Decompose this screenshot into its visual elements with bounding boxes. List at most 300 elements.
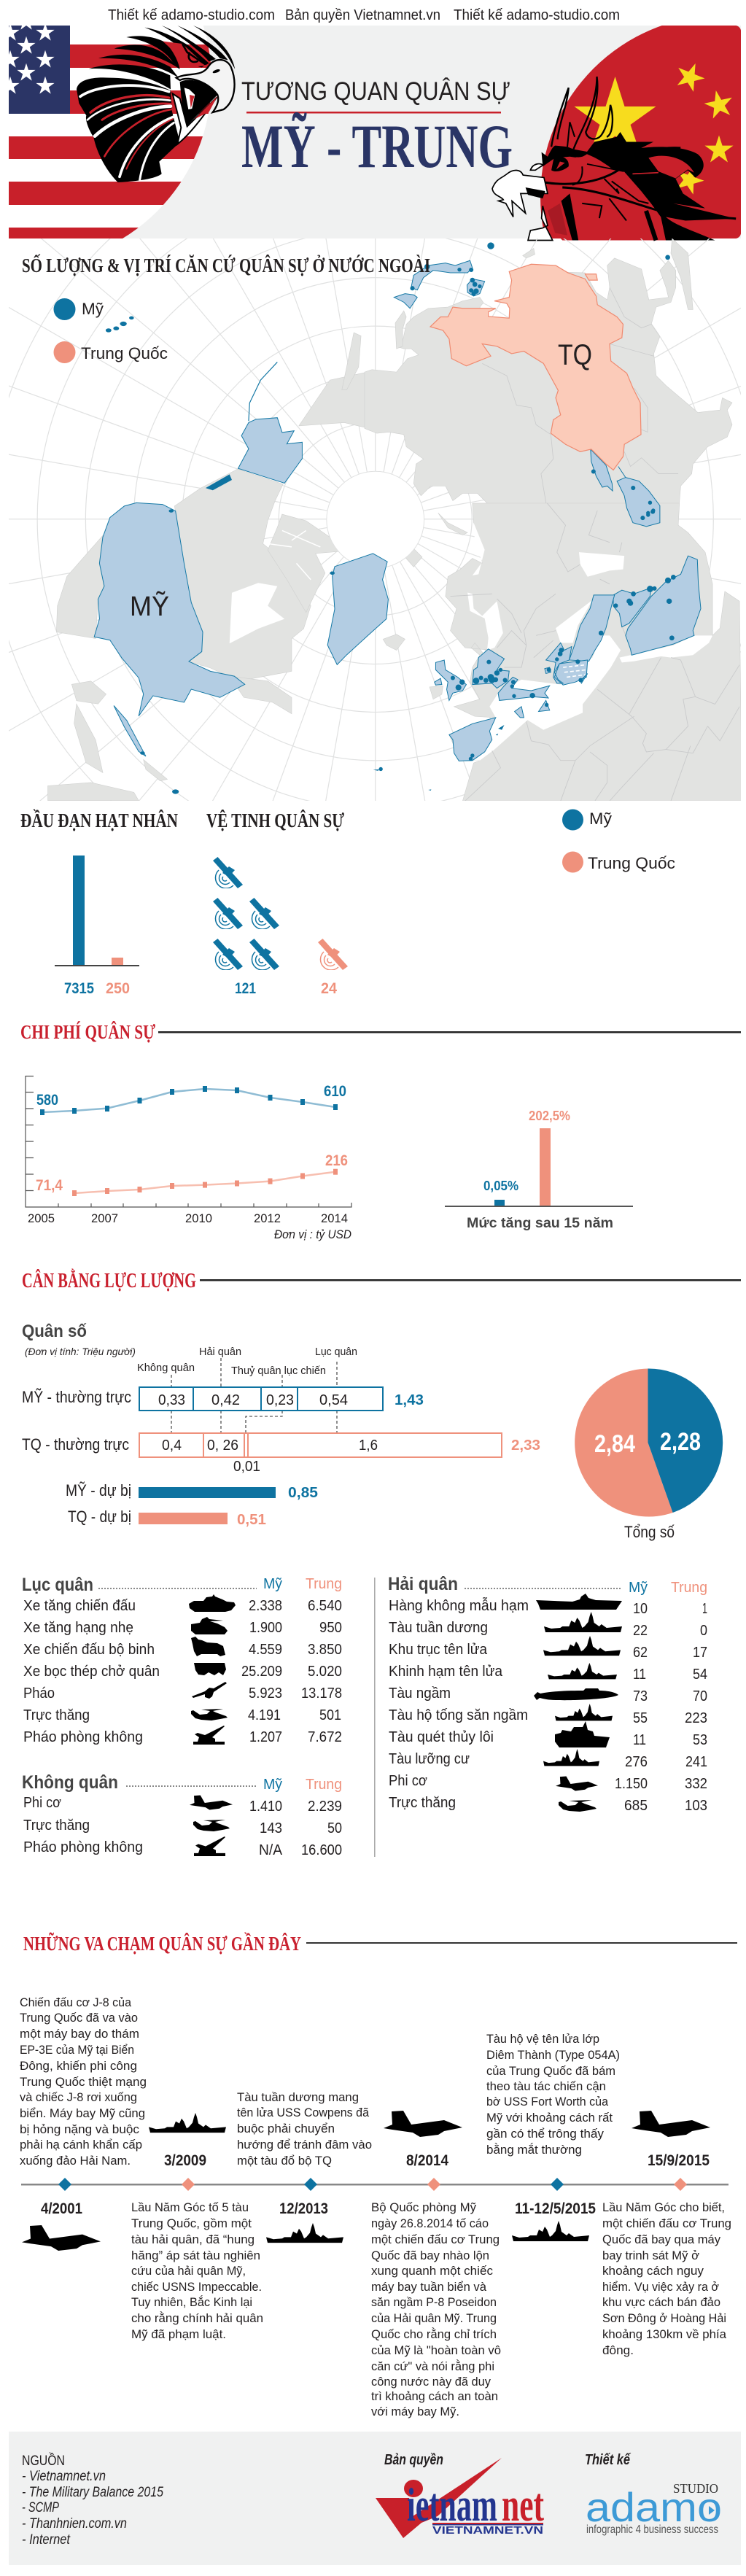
- line chart: spending 2005-2014: 2005: [28, 1211, 55, 1225]
- row: cruisers: [389, 1612, 707, 1639]
- event: 8/2014 text: xung quanh một chiếc: [371, 2264, 493, 2278]
- stacked bar: China active: 0,4: [162, 1438, 182, 1454]
- event: 11-12/5/2015 text: bằng mắt thường: [486, 2143, 582, 2157]
- row: infantry fighting vehicles: [23, 1637, 342, 1658]
- land: Arctic islands: [268, 513, 338, 613]
- event: 11-12/5/2015 text: theo tàu tác chiến cận: [486, 2079, 606, 2093]
- legend: map: Trung Quốc: [81, 344, 168, 362]
- bar: US reserve: 0,85: [288, 1485, 318, 1501]
- stacked bar: China active: 0,01: [233, 1459, 260, 1475]
- text: sources: - Vietnamnet.vn: [22, 2469, 106, 2484]
- event: 4/2001 text: Trung Quốc đã va vào: [20, 2011, 138, 2025]
- row: minesweepers: 53: [693, 1732, 707, 1748]
- row: main battle tanks: [23, 1594, 342, 1614]
- event: 4/2001 text: Trung Quốc thiệt mạng: [20, 2075, 147, 2089]
- event: 15/9/2015 text: Sơn Đông ở Hoàng Hải: [602, 2311, 726, 2325]
- stacked bar: US active: 0,42: [211, 1392, 240, 1408]
- icon: US flag: [9, 26, 211, 238]
- heading: army: Mỹ: [263, 1576, 282, 1592]
- stacked bar: China active: 1,6: [359, 1438, 378, 1454]
- row: naval aircraft: [389, 1773, 707, 1792]
- legend: right side: [562, 810, 675, 872]
- event: 15/9/2015 text: Quốc đã bay qua máy: [602, 2232, 720, 2246]
- event: 3/2009 text: Lầu Năm Góc tố 5 tàu: [131, 2200, 249, 2214]
- row: frigates: 11: [633, 1667, 646, 1683]
- event: 3/2009 text: hăng” áp sát tàu nghiên: [131, 2249, 260, 2262]
- row: corvettes: Tàu hộ tống săn ngầm: [389, 1707, 528, 1723]
- line chart: spending 2005-2014: 71,4: [36, 1177, 63, 1194]
- event: 4/2001 text: Đông, khiến phi công: [20, 2059, 137, 2073]
- event: 11-12/5/2015 text: [486, 2032, 620, 2157]
- icon: ship 11-12/5/2015: [512, 2221, 589, 2241]
- row: air force anti-aircraft: 16.600: [301, 1842, 342, 1858]
- event: 3/2009 text: tàu hải quân, đã “hung: [131, 2232, 255, 2246]
- stacked bar: US active: 0,23: [266, 1392, 294, 1408]
- region: Germany: [473, 649, 509, 688]
- heading: army: Trung: [306, 1576, 342, 1592]
- event: 3/2009 text: chiếc USNS Impeccable.: [131, 2280, 262, 2294]
- label: China on map: TQ: [558, 339, 592, 371]
- row: infantry fighting vehicles: 3.850: [308, 1642, 342, 1658]
- region: China: [430, 264, 641, 470]
- row: aircraft: 2.239: [308, 1799, 342, 1815]
- heading: navy: [388, 1574, 707, 1596]
- row: air force anti-aircraft: N/A: [259, 1842, 283, 1858]
- heading: overseas bases: SỐ LƯỢNG & VỊ TRÍ CĂN CỨ QUÂN SỰ Ở NƯỚC NGOÀI: [22, 254, 430, 276]
- row: amphibious ships: Tàu lưỡng cư: [389, 1751, 470, 1767]
- stacked bar: US active: 1,43: [395, 1392, 424, 1408]
- panel: footer: [9, 2432, 741, 2565]
- date: 11-12/5/2015: 11-12/5/2015: [515, 2200, 596, 2217]
- panel: navy table: [388, 1574, 707, 1814]
- stacked bar: US active: 0,54: [319, 1392, 348, 1408]
- row: amphibious ships: [389, 1749, 707, 1770]
- sea cut-outs: [467, 593, 503, 651]
- event: 8/2014 text: công nước này đã duy: [371, 2375, 491, 2389]
- event: 8/2014 text: [371, 2200, 501, 2418]
- label: copyright: Bản quyền: [384, 2452, 443, 2468]
- event: 15/9/2015 text: đông.: [602, 2343, 634, 2357]
- land: Chukotka: [299, 372, 368, 428]
- region: Balkans and Greece: [545, 643, 588, 685]
- row: naval helicopters: 685: [624, 1798, 648, 1814]
- row: aircraft: Phi cơ: [23, 1795, 61, 1811]
- icon: jet 15/9/2015: [632, 2111, 710, 2137]
- row: light tanks: Xe tăng hạng nhẹ: [23, 1620, 133, 1636]
- row: anti-aircraft: 7.672: [308, 1729, 342, 1745]
- row: frigates: [389, 1663, 707, 1683]
- stacked bar: US active: 0,33: [158, 1392, 185, 1408]
- row: armoured personnel carriers: 25.209: [241, 1664, 282, 1680]
- row: amphibious ships: 276: [625, 1754, 648, 1770]
- event: 3/2009 text: Trung Quốc, gồm một: [131, 2216, 252, 2230]
- logo: adamo studio: infographic 4 business success: [586, 2523, 718, 2536]
- event: 8/2014 text: ngày 26.8.2014 tố cáo: [371, 2216, 489, 2230]
- row: helicopters: 501: [319, 1707, 341, 1723]
- bar: China reserve: [68, 1508, 266, 1528]
- icon: jet 4/2001: [22, 2225, 101, 2251]
- region: Japan: [394, 260, 485, 309]
- icons: US satellites: [213, 857, 279, 970]
- text: sources: - The Military Balance 2015: [22, 2485, 163, 2500]
- event: 3/2009 text: Mỹ đã phạm luật.: [131, 2327, 226, 2341]
- icon: ship 12/2013: [266, 2223, 343, 2243]
- event: 8/2014 text: Quốc cho rằng chỉ trích: [371, 2327, 497, 2341]
- line chart: spending 2005-2014: 2010: [185, 1211, 212, 1225]
- value: China satellites: 24: [321, 980, 337, 997]
- bar: China reserve: 0,51: [237, 1512, 266, 1528]
- row: amphibious ships: 241: [685, 1754, 707, 1770]
- row: air force helicopters: 143: [260, 1820, 282, 1836]
- legend: map: Mỹ: [82, 300, 104, 318]
- text: sources: [22, 2453, 163, 2548]
- region: Italy: [498, 677, 550, 718]
- pie chart: total: [575, 1368, 723, 1541]
- row: armoured personnel carriers: [23, 1663, 342, 1680]
- row: aircraft: [23, 1795, 342, 1815]
- stacked bar: US active: [22, 1387, 424, 1411]
- event: 12/2013 text: Tàu tuần dương mang: [237, 2090, 359, 2104]
- heading: army: [22, 1575, 342, 1595]
- icon: ship 3/2009: [149, 2113, 226, 2133]
- bases: Europe and Middle East dots: [378, 508, 676, 771]
- row: aircraft carriers: 1: [702, 1601, 707, 1617]
- row: frigates: Khinh hạm tên lửa: [389, 1664, 503, 1680]
- event: 8/2014 text: của Mỹ là "hoàn toàn vô: [371, 2343, 501, 2357]
- bar: US reserve: [66, 1481, 318, 1501]
- event: 15/9/2015 text: một chiến đấu cơ Trung: [602, 2216, 731, 2230]
- row: naval aircraft: Phi cơ: [389, 1773, 427, 1789]
- row: helicopters: 4.191: [248, 1707, 281, 1723]
- bar chart: warheads: 7315: [64, 980, 94, 997]
- labels: service branches: Thuỷ quân lục chiến: [231, 1365, 326, 1377]
- event: 4/2001 text: Chiến đấu cơ J-8 của: [20, 1995, 132, 2009]
- regions: Europe and Middle East: [373, 508, 701, 791]
- legend: map: [54, 298, 168, 363]
- dashed connectors: [171, 1358, 337, 1433]
- event: 11-12/5/2015 text: Diêm Thành (Type 054A): [486, 2048, 620, 2062]
- panel: air force table: [22, 1772, 342, 1858]
- line chart: spending 2005-2014: 580: [36, 1092, 58, 1109]
- event: 8/2014 text: một chiến đấu cơ Trung: [371, 2232, 500, 2246]
- row: air force anti-aircraft: [23, 1836, 342, 1858]
- line chart: spending 2005-2014: [26, 1076, 351, 1241]
- regions: Asia: [394, 242, 670, 527]
- stacked bar: US active: MỸ - thường trực: [22, 1388, 131, 1406]
- date: 12/2013: 12/2013: [279, 2200, 328, 2217]
- bar chart: warheads: [55, 856, 139, 997]
- pie chart: total: 2,28: [660, 1428, 701, 1456]
- row: aircraft: 1.410: [249, 1799, 282, 1815]
- row: air force helicopters: 50: [327, 1820, 342, 1836]
- labels: service branches: Không quân: [137, 1362, 195, 1374]
- land: eastern Canada: [230, 676, 292, 714]
- bar chart: increase after 15 years: 0,05%: [483, 1179, 518, 1193]
- region: Aleutian arc: [249, 362, 277, 421]
- row: armoured personnel carriers: Xe bọc thép chở quân: [23, 1664, 160, 1680]
- row: naval helicopters: 103: [685, 1798, 707, 1814]
- event: 8/2014 text: của Hải quân Mỹ. Trung: [371, 2311, 497, 2325]
- event: 4/2001 text: bị hỏng nặng và buộc: [20, 2122, 139, 2136]
- bar chart: increase after 15 years: [445, 1109, 633, 1231]
- bar chart: warheads: 250: [106, 980, 130, 997]
- heading: army: Lục quân: [22, 1575, 93, 1595]
- event: 4/2001 text: xuống đảo Hải Nam.: [20, 2154, 131, 2168]
- text: sources: NGUỒN: [22, 2453, 65, 2469]
- heading: navy: Mỹ: [629, 1580, 648, 1596]
- heading: balance of forces: CÂN BẰNG LỰC LƯỢNG: [22, 1268, 196, 1292]
- row: corvettes: [389, 1704, 707, 1726]
- event: 12/2013 text: tên lửa USS Cowpens đã: [237, 2106, 370, 2119]
- event: 11-12/5/2015 text: bờ USS Fort Worth của: [486, 2095, 609, 2108]
- date: 3/2009: 3/2009: [164, 2152, 206, 2169]
- row: air force helicopters: Trực thăng: [23, 1817, 90, 1834]
- row: light tanks: 950: [319, 1620, 342, 1636]
- row: artillery: [23, 1682, 342, 1702]
- value: US satellites: 121: [235, 980, 256, 997]
- note: unit: (Đơn vị tính: Triệu người): [25, 1346, 136, 1357]
- date: 4/2001: 4/2001: [41, 2200, 82, 2217]
- labels: service branches: [137, 1346, 357, 1377]
- row: corvettes: 223: [685, 1710, 707, 1726]
- logo: Vietnamnet: ietnam: [407, 2479, 497, 2532]
- top credit line: Thiết kế adamo-studio.com: [454, 7, 620, 23]
- event: 3/2009 text: cho rằng chính hải quân: [131, 2311, 263, 2325]
- row: destroyers: 17: [693, 1645, 707, 1661]
- panel: army table: [22, 1575, 342, 1745]
- pie chart: total: 2,84: [594, 1430, 635, 1458]
- region: UK: [435, 660, 466, 700]
- event: 4/2001 text: EP-3E của Mỹ tại Biển: [20, 2043, 134, 2057]
- land: Europe, Middle East and Africa: [383, 503, 742, 801]
- bar: US reserve: MỸ - dự bị: [66, 1481, 131, 1500]
- legend: right side: Trung Quốc: [588, 854, 675, 872]
- event: 15/9/2015 text: bay trinh sát Mỹ ở: [602, 2249, 699, 2262]
- text: sources: - Internet: [22, 2532, 71, 2548]
- region: Iraq: [613, 588, 651, 627]
- region: Caribbean and Panama: [114, 705, 146, 756]
- event: 8/2014 text: Quốc đã bay nhào lộn: [371, 2249, 489, 2262]
- row: artillery: 13.178: [301, 1685, 342, 1702]
- event: 3/2009 text: [131, 2200, 263, 2341]
- label: USA on map: MỸ: [130, 591, 169, 622]
- row: helicopters: Trực thăng: [23, 1707, 90, 1723]
- row: minesweepers: [389, 1721, 707, 1748]
- event: 8/2014 text: Bộ Quốc phòng Mỹ: [371, 2200, 476, 2214]
- event: 15/9/2015 text: khu vực cách bán đảo: [602, 2295, 720, 2309]
- line chart: spending 2005-2014: 216: [325, 1152, 348, 1169]
- line chart: spending 2005-2014: 2012: [254, 1211, 281, 1225]
- row: submarines: Tàu ngầm: [389, 1685, 451, 1702]
- region: Greenland: [327, 554, 388, 664]
- logo: Vietnamnet: [376, 2458, 544, 2538]
- row: main battle tanks: 6.540: [308, 1598, 342, 1614]
- land: Asia upper: [365, 238, 732, 516]
- event: 11-12/5/2015 text: gần có thể trông thấy: [486, 2127, 604, 2141]
- row: aircraft carriers: [389, 1594, 707, 1617]
- event: 11-12/5/2015 text: của Trung Quốc đã bám: [486, 2064, 615, 2078]
- row: infantry fighting vehicles: 4.559: [249, 1642, 282, 1658]
- row: cruisers: 22: [633, 1623, 648, 1639]
- row: aircraft carriers: Hàng không mẫu hạm: [389, 1597, 529, 1614]
- row: destroyers: Khu trục tên lửa: [389, 1642, 488, 1658]
- event: 15/9/2015 text: [602, 2200, 731, 2357]
- event: 8/2014 text: săn ngầm P-8 Poseidon: [371, 2295, 497, 2309]
- logo: Vietnamnet: VIETNAMNET.VN: [432, 2524, 543, 2537]
- heading: nuclear warheads: ĐẦU ĐẠN HẠT NHÂN: [20, 809, 178, 831]
- event: 4/2001 text: và chiếc J-8 rơi xuống: [20, 2090, 137, 2104]
- event: 4/2001 text: một máy bay do thám: [20, 2027, 139, 2041]
- icon: jet 8/2014: [384, 2111, 462, 2137]
- event: 3/2009 text: Tuy nhiên, Bắc Kinh lại: [131, 2295, 252, 2309]
- row: artillery: Pháo: [23, 1685, 55, 1702]
- graticule: [9, 238, 741, 801]
- bar: China reserve: TQ - dự bị: [68, 1508, 131, 1526]
- row: helicopters: [23, 1707, 341, 1723]
- row: cruisers: Tàu tuần dương: [389, 1620, 488, 1636]
- heading: air force: Mỹ: [263, 1777, 282, 1793]
- event: 4/2001 text: phải hạ cánh khẩn cấp: [20, 2138, 142, 2152]
- panel: military satellites: [206, 810, 348, 997]
- event: 15/9/2015 text: khoảng cách nguy: [602, 2264, 704, 2278]
- inner polar circle: [327, 471, 424, 568]
- heading: air force: Trung: [306, 1777, 342, 1793]
- event: 8/2014 text: căn cứ" và nói rằng phi: [371, 2359, 494, 2373]
- icon: China satellite: [318, 939, 348, 970]
- line chart: spending 2005-2014: 610: [324, 1083, 346, 1100]
- event: 12/2013 text: buộc phải chuyển: [237, 2122, 335, 2135]
- icon: eagle: [77, 26, 235, 182]
- event: 12/2013 text: một tàu đổ bộ TQ: [237, 2154, 332, 2168]
- row: air force helicopters: [23, 1817, 342, 1836]
- region: Spain: [449, 718, 496, 761]
- row: main battle tanks: Xe tăng chiến đấu: [23, 1598, 136, 1614]
- heading: air force: Không quân: [22, 1772, 118, 1793]
- row: submarines: [389, 1685, 707, 1704]
- row: submarines: 70: [693, 1688, 707, 1704]
- heading: air force: [22, 1772, 342, 1793]
- date: 8/2014: 8/2014: [406, 2152, 448, 2169]
- region: Alaska: [238, 418, 302, 483]
- timeline axis with markers: [21, 2178, 728, 2191]
- row: anti-aircraft: [23, 1726, 342, 1745]
- row: anti-aircraft: 1.207: [249, 1729, 282, 1745]
- row: light tanks: [23, 1617, 342, 1636]
- icon: China flag with stars: [540, 26, 741, 238]
- top credit line: Bản quyền Vietnamnet.vn: [285, 7, 440, 23]
- heading: military spending: CHI PHÍ QUÂN SỰ: [20, 1021, 155, 1043]
- row: destroyers: [389, 1636, 707, 1661]
- row: aircraft carriers: 10: [633, 1601, 648, 1617]
- line chart: spending 2005-2014: 2014: [321, 1211, 348, 1225]
- logo: adamo studio: adamo: [586, 2484, 722, 2530]
- panel: base map: [9, 238, 741, 801]
- event: 4/2001 text: [20, 1995, 147, 2168]
- text: sources: - SCMP: [22, 2500, 59, 2515]
- line chart: spending 2005-2014: Đơn vị : tỷ USD: [274, 1227, 351, 1241]
- heading: navy: Hải quân: [388, 1574, 458, 1594]
- region: Saudi Arabia: [626, 556, 701, 655]
- event: 8/2014 text: trì khoảng cách an toàn: [371, 2389, 498, 2403]
- event: 8/2014 text: máy bay tuần biển và: [371, 2280, 487, 2294]
- bar chart: increase after 15 years: 202,5%: [529, 1109, 570, 1123]
- row: naval aircraft: 1.150: [615, 1776, 648, 1792]
- bases: US dots in the Americas and Pacific: [106, 317, 335, 794]
- top credit line: [108, 7, 620, 23]
- event: 8/2014 text: với máy bay Mỹ.: [371, 2405, 459, 2418]
- labels: service branches: Hải quân: [199, 1346, 241, 1358]
- heading: satellites: VỆ TINH QUÂN SỰ: [206, 810, 344, 831]
- stacked bar: China active: 2,33: [511, 1438, 540, 1454]
- stacked bar: China active: TQ - thường trực: [22, 1435, 129, 1454]
- panel: timeline: [20, 1995, 731, 2418]
- heading: recent incidents: NHỮNG VA CHẠM QUÂN SỰ GẦN ĐÂY: [23, 1932, 301, 1955]
- region: Thailand: [617, 466, 660, 527]
- event: 3/2009 text: cứu của hải quân Mỹ,: [131, 2264, 246, 2278]
- row: minesweepers: Tàu quét thủy lôi: [389, 1729, 494, 1745]
- land: Iceland, Svalbard, Novaya Zemlya, Ireland: [383, 513, 467, 699]
- heading: troops: Quân số: [22, 1322, 87, 1341]
- event: 15/9/2015 text: khoảng 130km về phía: [602, 2327, 727, 2341]
- stacked bar: China active: [22, 1433, 540, 1475]
- line chart: spending 2005-2014: 2007: [91, 1211, 118, 1225]
- row: minesweepers: 11: [633, 1732, 646, 1748]
- date: 15/9/2015: 15/9/2015: [648, 2152, 710, 2169]
- row: artillery: 5.923: [249, 1685, 282, 1702]
- row: light tanks: 1.900: [249, 1620, 282, 1636]
- event: 11-12/5/2015 text: Mỹ với khoảng cách rất: [486, 2111, 613, 2125]
- panel: nuclear warheads: [20, 809, 178, 997]
- heading: navy: Trung: [671, 1580, 707, 1596]
- region: South Korea: [591, 449, 613, 491]
- logo: Vietnamnet: net: [502, 2479, 544, 2532]
- land: Canada: [174, 469, 311, 681]
- event: 12/2013 text: [237, 2090, 372, 2168]
- row: anti-aircraft: Pháo phòng không: [23, 1729, 143, 1745]
- title: Mỹ - Trung: MỸ - TRUNG: [241, 112, 513, 181]
- stacked bar: China active: 0, 26: [207, 1438, 238, 1454]
- land: Sakhalin-like island: [342, 333, 361, 390]
- row: naval helicopters: [389, 1795, 707, 1814]
- legend: right side: Mỹ: [589, 810, 612, 828]
- row: armoured personnel carriers: 5.020: [308, 1664, 342, 1680]
- row: cruisers: 0: [700, 1623, 707, 1639]
- row: naval helicopters: Trực thăng: [389, 1795, 456, 1811]
- panel: troop numbers: [22, 1322, 723, 1541]
- row: destroyers: 62: [633, 1645, 648, 1661]
- land: Mexico strip and Americas: [56, 535, 104, 639]
- event: 15/9/2015 text: hiểm. Vụ việc xảy ra ở: [602, 2280, 719, 2294]
- region: Turkey: [570, 595, 615, 662]
- panel: header banner: [9, 26, 741, 241]
- bases: Asia dots: [410, 242, 670, 520]
- bar chart: increase after 15 years: Mức tăng sau 15 năm: [467, 1216, 613, 1231]
- row: main battle tanks: 2.338: [249, 1598, 282, 1614]
- event: 4/2001 text: biển. Máy bay Mỹ cũng: [20, 2106, 145, 2120]
- labels: service branches: Lục quân: [315, 1346, 357, 1358]
- event: 11-12/5/2015 text: Tàu hộ vệ tên lửa lớp: [486, 2032, 599, 2046]
- row: air force anti-aircraft: Pháo phòng không: [23, 1839, 143, 1855]
- icon: dragon: [492, 77, 736, 241]
- logo: adamo studio: STUDIO: [673, 2481, 718, 2496]
- title: Tương quan quân sự: TƯƠNG QUAN QUÂN SỰ: [241, 77, 510, 106]
- pie chart: total: Tổng số: [624, 1523, 675, 1541]
- row: frigates: 54: [693, 1667, 707, 1683]
- event: 12/2013 text: hướng để tránh đâm vào: [237, 2138, 372, 2152]
- event: 15/9/2015 text: Lầu Năm Góc cho biết,: [602, 2200, 725, 2214]
- text: sources: - Thanhnien.com.vn: [22, 2516, 127, 2532]
- row: infantry fighting vehicles: Xe chiến đấu bộ binh: [23, 1642, 155, 1658]
